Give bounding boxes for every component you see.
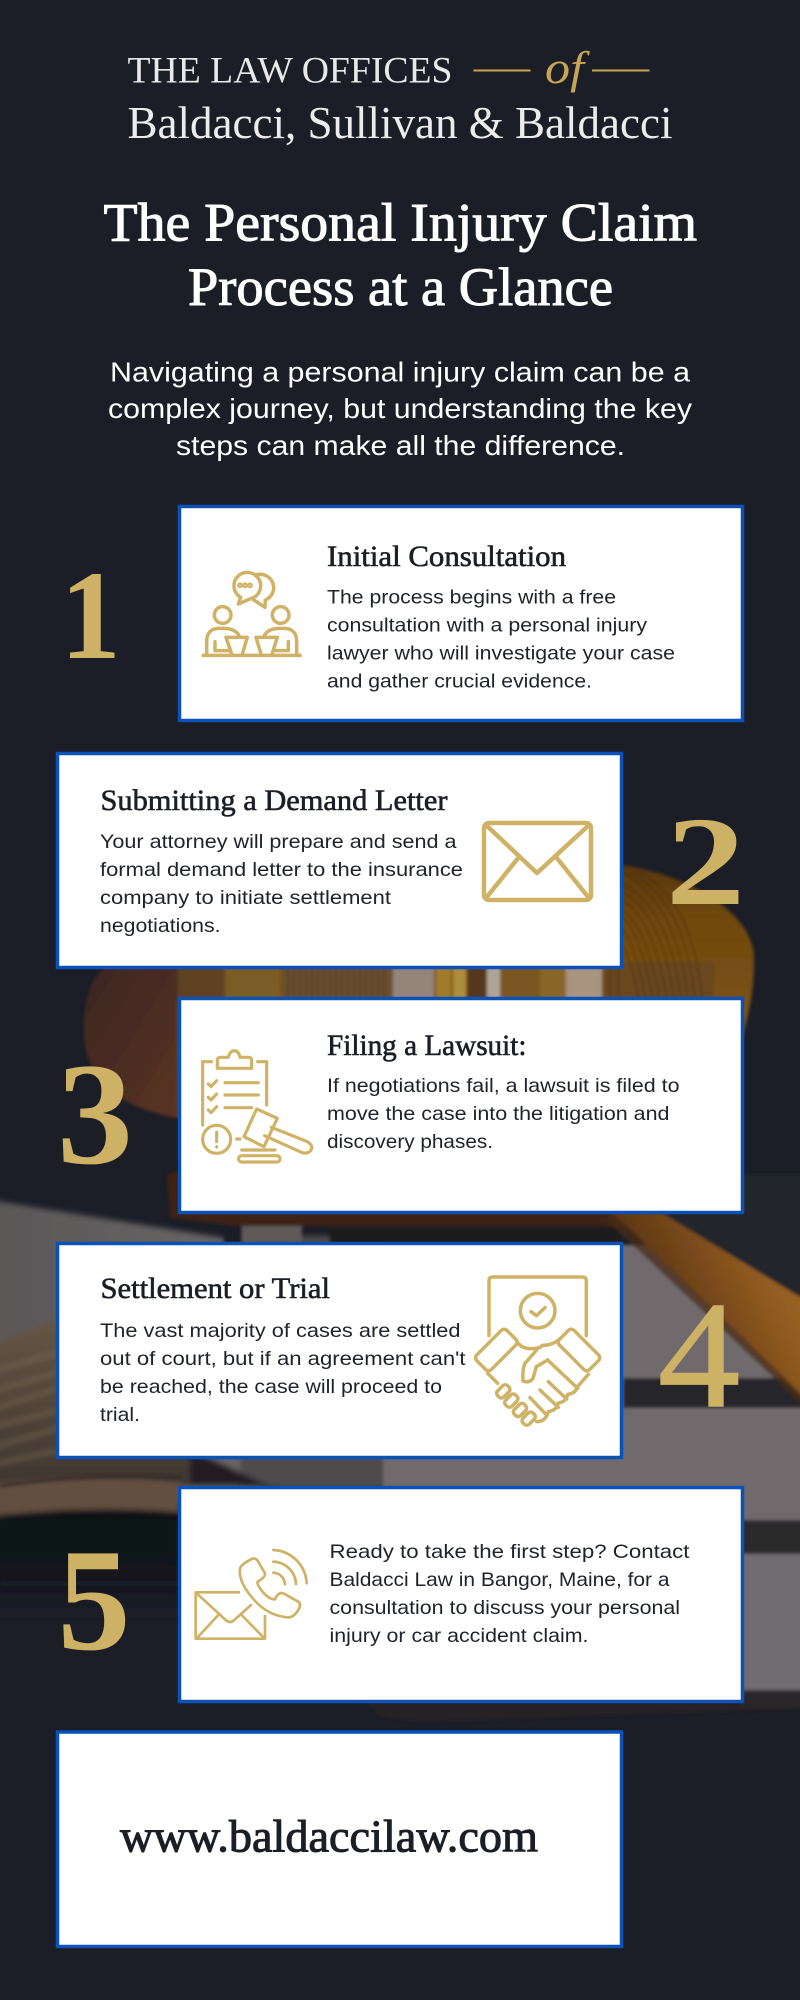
body 2: Your attorney will prepare and send a	[100, 831, 457, 853]
dark book cover, left	[0, 1509, 180, 1615]
number 3: 3	[57, 1034, 133, 1195]
body 1: lawyer who will investigate your case	[327, 642, 675, 664]
body 5: consultation to discuss your personal	[330, 1597, 680, 1619]
website card	[58, 1732, 622, 1946]
card 3	[180, 998, 742, 1212]
body 4: be reached, the case will proceed to	[100, 1376, 442, 1398]
body 2: formal demand letter to the insurance	[100, 859, 463, 881]
title: Process at a Glance	[188, 257, 613, 317]
step 3	[57, 998, 742, 1212]
card 2	[58, 754, 622, 968]
left book block	[0, 1300, 200, 1486]
body 3	[327, 1075, 680, 1153]
logo: The Law Offices of Baldacci, Sullivan & Baldacci: THE LAW OFFICES	[128, 50, 453, 92]
gavel head	[84, 862, 754, 1118]
body 4	[100, 1320, 466, 1426]
open book page, left	[0, 1200, 260, 1500]
body 2: company to initiate settlement	[100, 887, 392, 909]
logo: The Law Offices of Baldacci, Sullivan & Baldacci: Baldacci, Sullivan & Baldacci	[128, 97, 672, 148]
step 5	[58, 1488, 742, 1702]
icon: envelope	[484, 823, 591, 900]
body 5: Baldacci Law in Bangor, Maine, for a	[330, 1569, 670, 1591]
icon: handshake and document	[474, 1277, 601, 1427]
body 5: injury or car accident claim.	[330, 1625, 588, 1647]
body 4: trial.	[100, 1404, 140, 1426]
logo: The Law Offices of Baldacci, Sullivan & Baldacci: of	[545, 42, 591, 93]
wood grooves	[622, 872, 702, 1000]
body 1: consultation with a personal injury	[327, 614, 647, 636]
card 4	[58, 1244, 622, 1458]
heading 3: Filing a Lawsuit:	[327, 1029, 526, 1062]
number 5: 5	[58, 1519, 130, 1681]
website url: www.baldaccilaw.com	[120, 1810, 538, 1862]
background photo: gavel and books	[0, 862, 800, 1722]
step 2	[58, 754, 745, 968]
intro text: Navigating a personal injury claim can be a	[110, 356, 691, 388]
heading 4: Settlement or Trial	[100, 1272, 330, 1305]
body 4: out of court, but if an agreement can't	[100, 1348, 466, 1370]
step 1	[60, 506, 743, 720]
gavel handle	[612, 1212, 800, 1404]
body 5	[330, 1541, 690, 1647]
body 4: The vast majority of cases are settled	[100, 1320, 461, 1342]
body 1: and gather crucial evidence.	[327, 670, 592, 692]
body 3: discovery phases.	[327, 1131, 493, 1153]
icon: envelope and phone	[196, 1550, 307, 1639]
title: The Personal Injury Claim	[104, 192, 697, 252]
heading 2: Submitting a Demand Letter	[100, 784, 448, 817]
body 2	[100, 831, 463, 937]
icon: consultation	[202, 572, 302, 655]
step 4	[58, 1244, 740, 1458]
intro text	[108, 356, 692, 461]
title	[104, 192, 697, 317]
card 5	[180, 1488, 742, 1702]
number 4: 4	[658, 1271, 740, 1440]
body 2: negotiations.	[100, 915, 220, 937]
grey book pages, right	[383, 1245, 800, 1570]
number 1: 1	[60, 545, 121, 686]
dark region above handle	[623, 1175, 800, 1305]
intro text: steps can make all the difference.	[176, 430, 625, 461]
logo: The Law Offices of Baldacci, Sullivan & Baldacci	[128, 42, 672, 148]
intro text: complex journey, but understanding the key	[108, 393, 692, 424]
gavel base	[167, 1170, 660, 1232]
number 2: 2	[666, 792, 745, 932]
body 3: If negotiations fail, a lawsuit is filed to	[327, 1075, 680, 1097]
body 5: Ready to take the first step? Contact	[330, 1541, 690, 1563]
icon: clipboard and gavel	[203, 1051, 312, 1162]
body 1: The process begins with a free	[327, 586, 616, 608]
body 1	[327, 586, 675, 692]
body 3: move the case into the litigation and	[327, 1103, 670, 1125]
heading 1: Initial Consultation	[327, 540, 566, 573]
card 1	[180, 506, 742, 720]
